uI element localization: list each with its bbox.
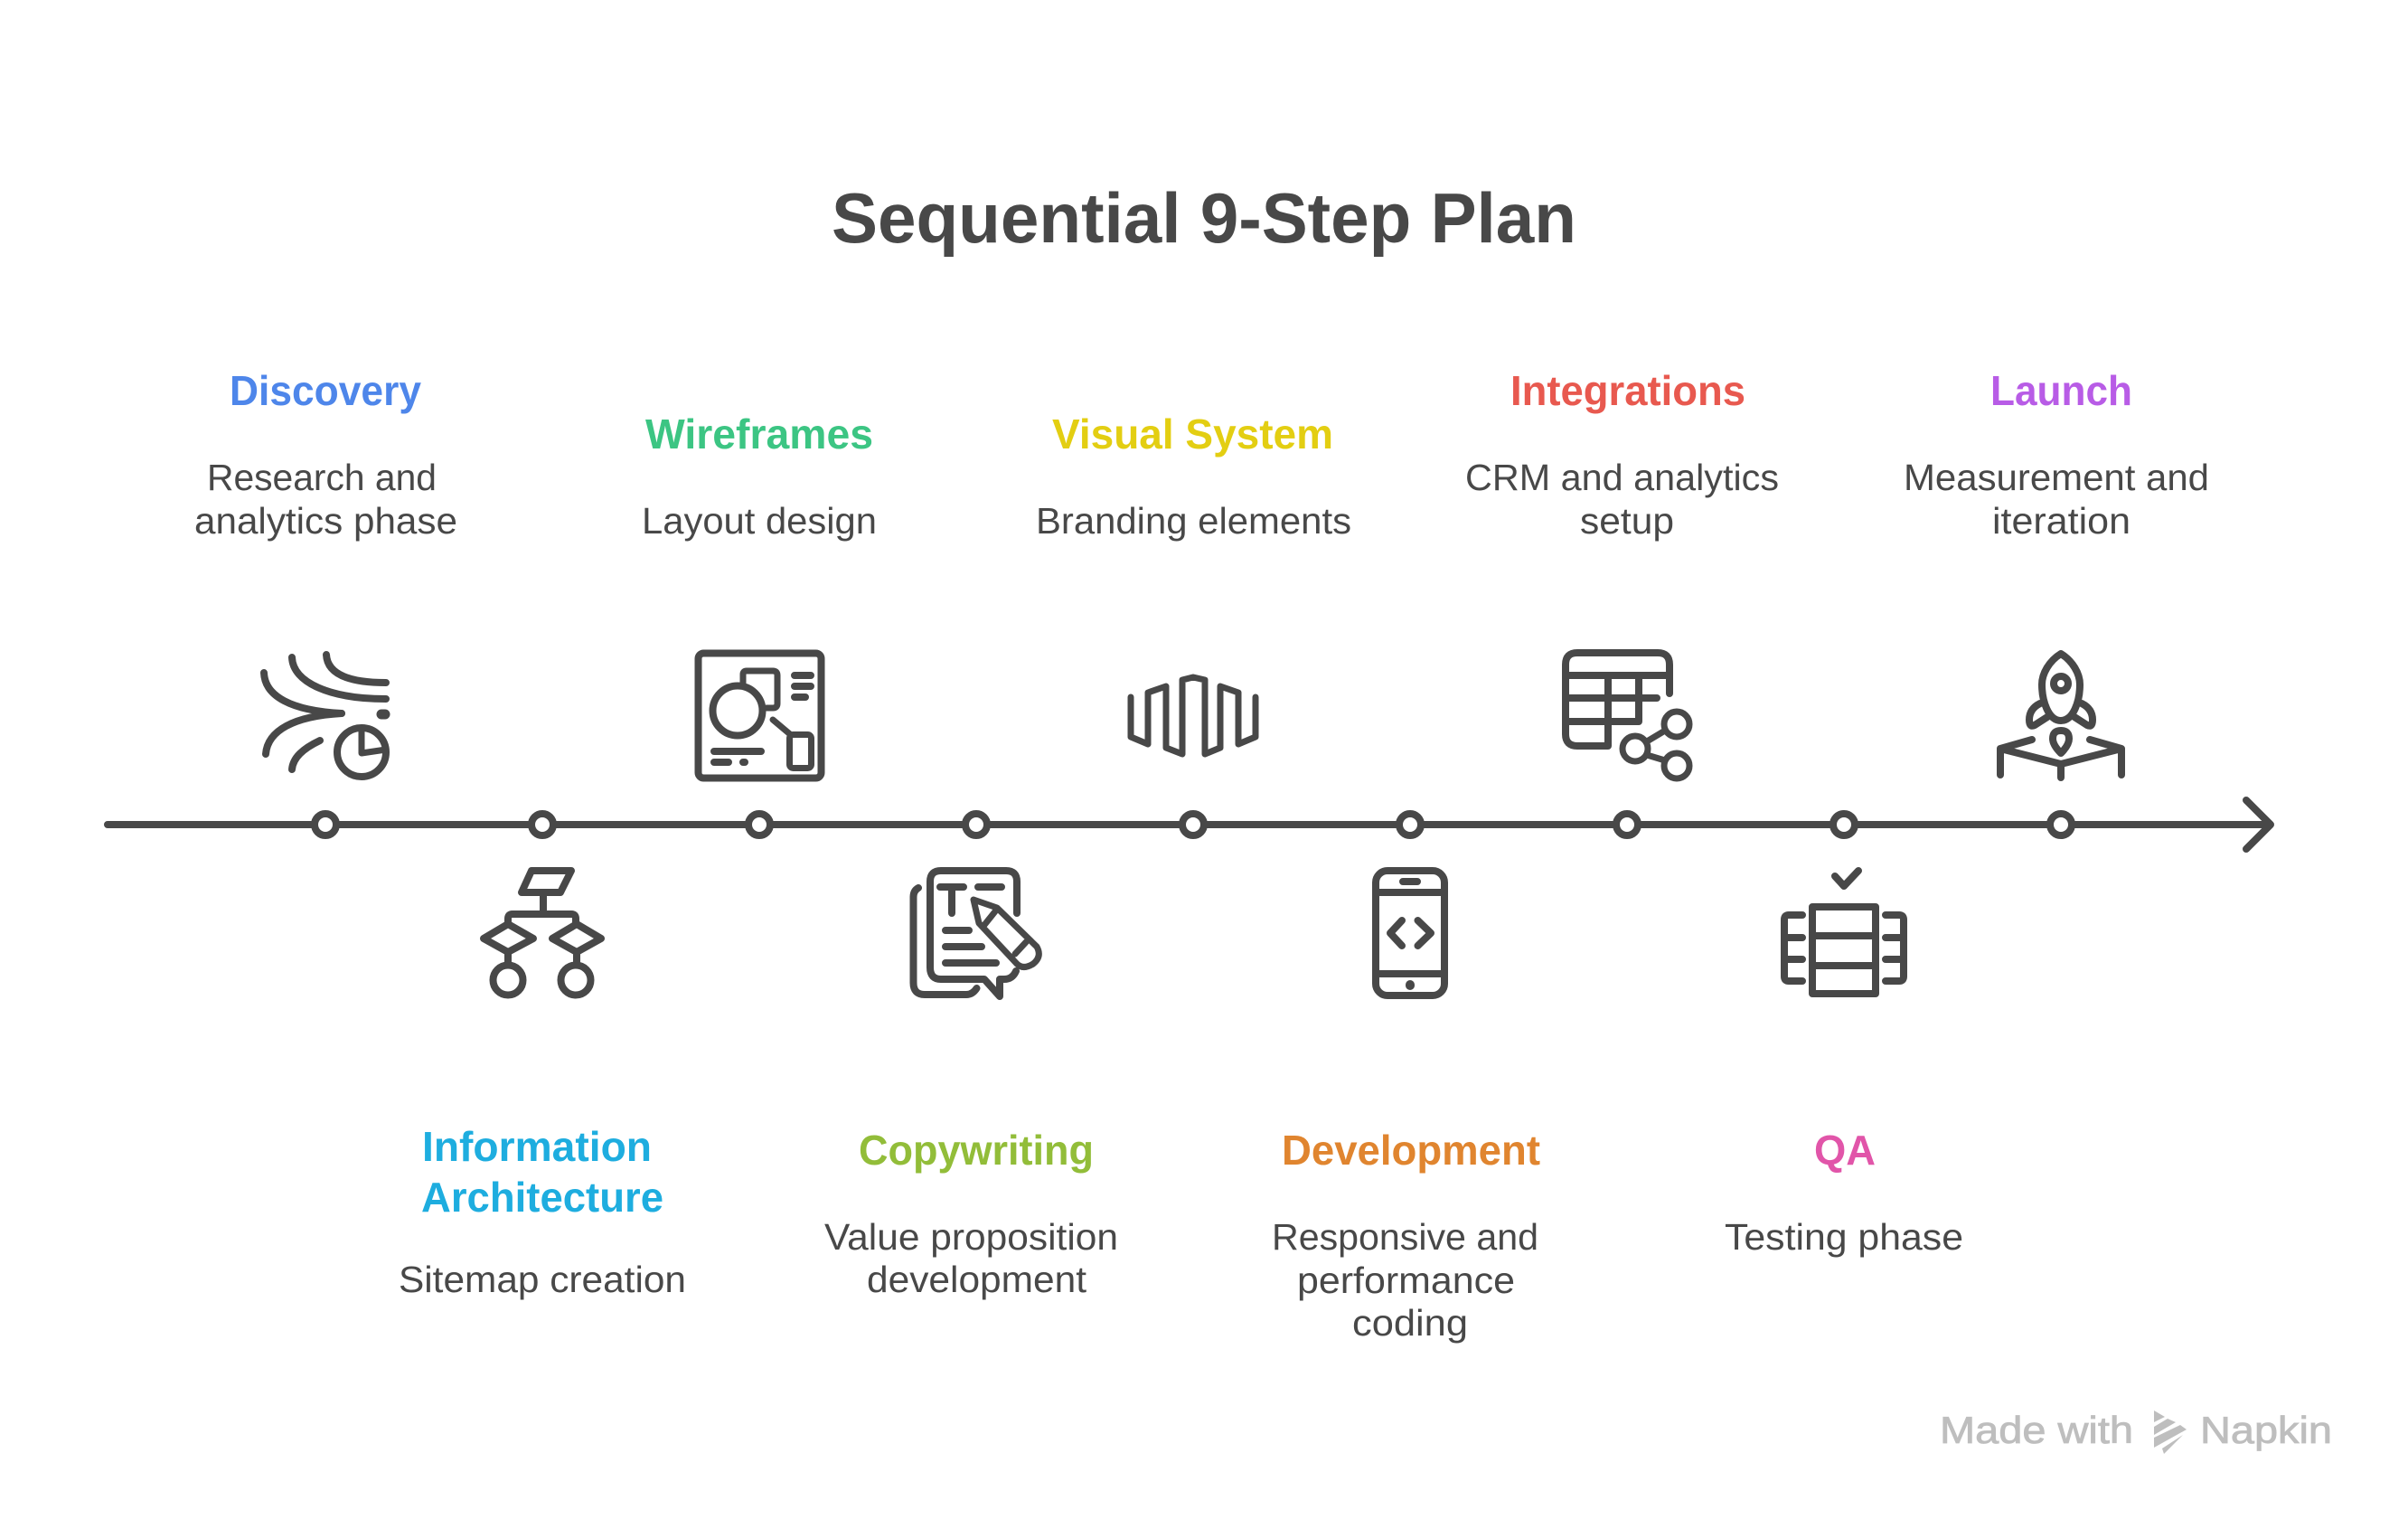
- step 8: QA: [1725, 814, 1963, 1258]
- node 8: [1833, 814, 1855, 835]
- watermark: Made with Napkin: Made with: [1940, 1409, 2133, 1451]
- heading: Copywriting: Copywriting: [859, 1127, 1094, 1174]
- heading: Discovery: Discovery: [230, 367, 421, 414]
- description: Copywriting: [824, 1216, 1118, 1300]
- description: Discovery: [194, 457, 457, 542]
- heading: Information Architecture: [421, 1123, 663, 1221]
- description: Discovery: analytics phase: [194, 500, 457, 542]
- icon: wireframe layout: [698, 653, 821, 778]
- node 5: [1182, 814, 1204, 835]
- description: Wireframes: Layout design: [642, 500, 877, 542]
- description: Visual System: Branding elements: [1036, 500, 1351, 542]
- watermark: Made with Napkin: Napkin: [2200, 1409, 2332, 1451]
- heading: Information Architecture: Architecture: [421, 1174, 663, 1221]
- node 2: [531, 814, 553, 835]
- icon: checked server: [1784, 871, 1904, 994]
- node 1: [315, 814, 336, 835]
- heading: QA: QA: [1814, 1127, 1876, 1174]
- description: Integrations: CRM and analytics: [1465, 457, 1779, 498]
- icon: flowchart: [484, 871, 601, 995]
- description: Launch: iteration: [1992, 500, 2131, 542]
- icon: waveform: [1131, 677, 1256, 754]
- description: QA: Testing phase: [1725, 1216, 1963, 1258]
- description: Discovery: Research and: [207, 457, 437, 498]
- icon: smartphone with code: [1376, 871, 1444, 995]
- description: Information Architecture: Sitemap creation: [399, 1259, 686, 1300]
- step 7: Integrations: [1465, 367, 1779, 835]
- heading: Integrations: Integrations: [1510, 367, 1745, 414]
- step 9: Launch: [1904, 367, 2209, 835]
- description: Integrations: setup: [1580, 500, 1674, 542]
- description: Integrations: [1465, 457, 1779, 542]
- description: Copywriting: Value proposition: [824, 1216, 1118, 1258]
- icon: Napkin logo: [2154, 1410, 2187, 1454]
- step 1: Discovery: [194, 367, 457, 835]
- title: Sequential 9-Step Plan: [832, 178, 1576, 258]
- icon: rocket launch: [2000, 654, 2121, 778]
- step 4: Copywriting: [824, 814, 1118, 1300]
- node 9: [2050, 814, 2072, 835]
- node 3: [748, 814, 770, 835]
- node 4: [965, 814, 987, 835]
- node 6: [1399, 814, 1421, 835]
- heading: Visual System: Visual System: [1052, 410, 1333, 458]
- description: Development: performance: [1297, 1260, 1515, 1301]
- step 6: Development: [1272, 814, 1540, 1344]
- heading: Wireframes: Wireframes: [645, 410, 873, 458]
- description: Launch: [1904, 457, 2209, 542]
- heading: Development: Development: [1282, 1127, 1540, 1174]
- description: Development: Responsive and: [1272, 1216, 1538, 1258]
- description: Copywriting: development: [867, 1259, 1087, 1300]
- heading: Information Architecture: Information: [422, 1123, 652, 1170]
- icon: table with share nodes: [1566, 653, 1689, 778]
- step 3: Wireframes: [642, 410, 877, 835]
- description: Development: [1272, 1216, 1538, 1344]
- icon: wind and pie chart: [264, 655, 386, 777]
- description: Development: coding: [1352, 1302, 1468, 1344]
- step 2: Information Architecture: [399, 814, 686, 1300]
- heading: Launch: Launch: [1990, 367, 2132, 414]
- step 5: Visual System: [1036, 410, 1351, 835]
- watermark: Made with Napkin: [1940, 1409, 2332, 1454]
- node 7: [1616, 814, 1638, 835]
- description: Launch: Measurement and: [1904, 457, 2209, 498]
- timeline arrow: [108, 800, 2271, 849]
- icon: document with pencil: [913, 871, 1039, 996]
